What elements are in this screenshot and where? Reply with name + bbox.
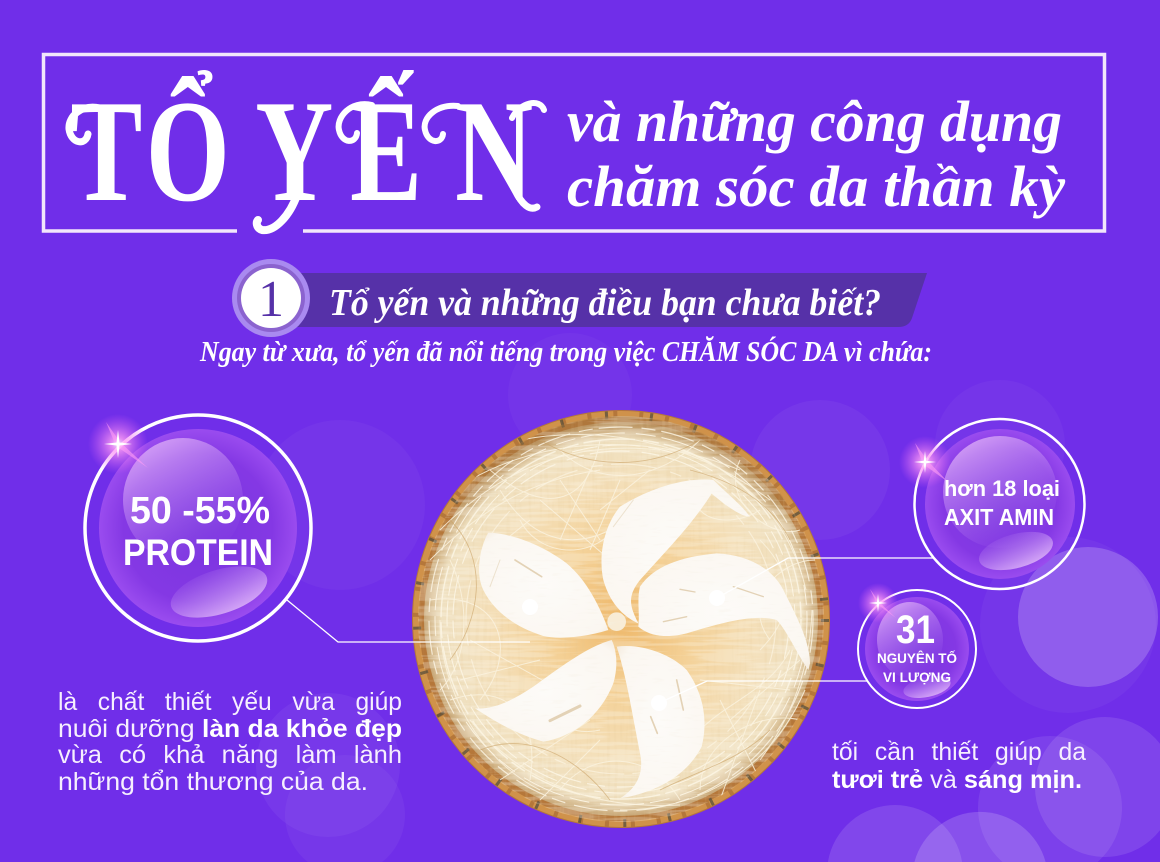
icon: sparkle	[88, 414, 148, 474]
bubble: trace elements: VI LƯỢNG	[883, 669, 951, 685]
intro line: Ngay từ xưa, tổ yến đã nổi tiếng trong việc CHĂM SÓC DA vì chứa:	[199, 335, 932, 368]
title: subtitle	[567, 89, 1065, 219]
bubble: trace elements: NGUYÊN TỐ	[877, 649, 957, 666]
text: protein description: những tổn thương của da.	[58, 768, 368, 796]
bokeh lights	[255, 333, 1160, 862]
text: protein description: là chất thiết yếu vừa giúp	[58, 688, 402, 716]
bubble: trace elements: 31	[896, 608, 935, 652]
bubble: protein	[85, 414, 311, 641]
section heading: Tổ yến và những điều bạn chưa biết?	[329, 282, 881, 324]
concentric nest strands	[429, 427, 813, 811]
bubble: trace elements	[858, 583, 976, 708]
section number badge: 1	[258, 271, 284, 328]
text: skin benefit description	[832, 738, 1086, 794]
decoration: letter swashes	[69, 103, 544, 230]
petal streaks	[490, 500, 763, 733]
section number badge	[232, 259, 310, 337]
bubble: protein: 50 -55%	[130, 490, 270, 532]
bubble: protein: PROTEIN	[123, 532, 273, 573]
title: subtitle: chăm sóc da thần kỳ	[567, 154, 1065, 219]
text: protein description	[58, 688, 402, 796]
title: subtitle: và những công dụng	[567, 89, 1062, 154]
callout lines and dots	[287, 558, 934, 711]
title: tổ yến: TỔ YẾN	[70, 68, 533, 232]
text: skin benefit description: tươi trẻ và sáng mịn.	[832, 766, 1082, 794]
bubble: amino acids	[899, 419, 1084, 589]
bubble: amino acids: hơn 18 loại	[944, 476, 1060, 501]
text: skin benefit description: tối cần thiết giúp da	[832, 738, 1086, 766]
nest petals	[475, 479, 810, 798]
text: protein description: nuôi dưỡng làn da khỏe đẹp	[58, 715, 402, 743]
bubble: amino acids: AXIT AMIN	[944, 504, 1054, 530]
icon: sparkle	[858, 583, 898, 623]
section banner	[232, 259, 927, 337]
title frame	[44, 54, 1104, 231]
text: protein description: vừa có khả năng làm lành	[58, 741, 402, 769]
icon: sparkle	[899, 436, 951, 488]
photo: bird's nest in woven basket	[412, 410, 830, 828]
